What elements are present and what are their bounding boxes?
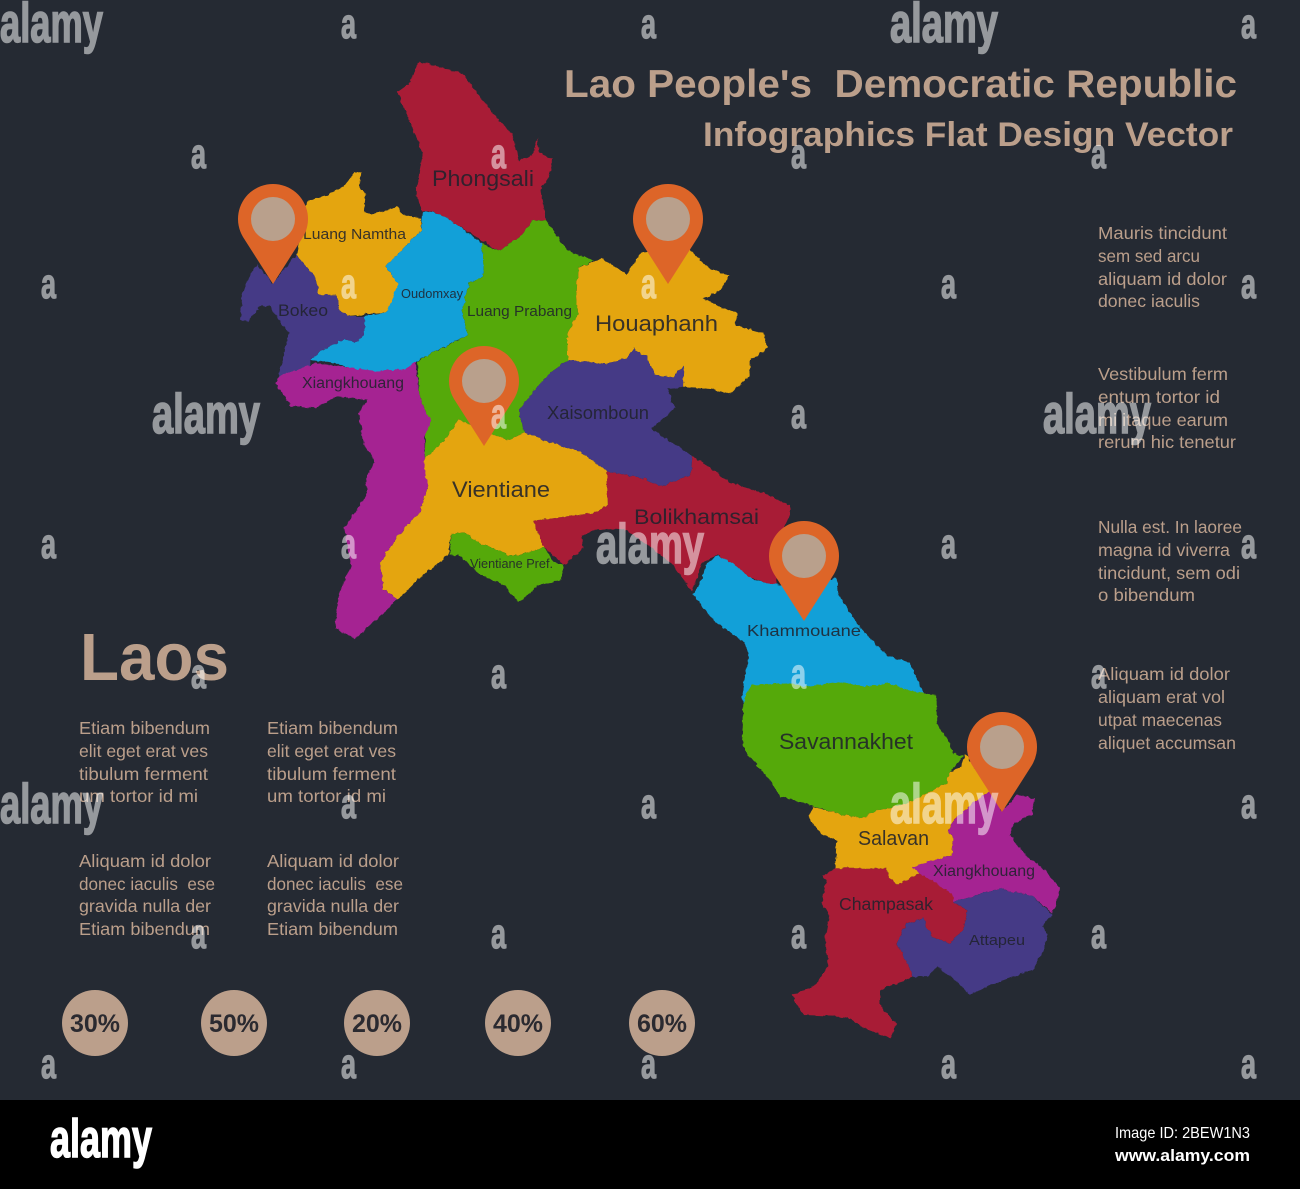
stock photo watermarks: a: [1241, 1040, 1256, 1087]
region: Khammouane: [693, 556, 925, 713]
region labels: Xaisomboun: [547, 403, 649, 423]
stock photo watermarks: a: [1091, 910, 1106, 957]
text block: right column 4: [1098, 664, 1236, 753]
text block: right column 4: aliquet accumsan: [1098, 733, 1236, 753]
text block: right column 1: donec iaculis: [1098, 291, 1200, 311]
text block: right column 3: magna id viverra: [1098, 540, 1230, 560]
text block: right column 1: Mauris tincidunt: [1098, 223, 1227, 243]
stock photo watermarks: a: [1091, 130, 1106, 177]
text block: left column 2 top: um tortor id mi: [267, 786, 386, 806]
stock photo watermarks: a: [341, 1040, 356, 1087]
stock photo watermarks: alamy: [596, 512, 704, 575]
text block: left column 2 top: tibulum ferment: [267, 764, 396, 784]
stock photo watermarks: a: [1241, 260, 1256, 307]
text block: left column 1 bottom: [79, 851, 215, 939]
text block: right column 2: entum tortor id: [1098, 387, 1220, 407]
region labels: Vientiane: [452, 477, 550, 502]
stock photo watermarks: a: [791, 910, 806, 957]
percentage circle 50%: [201, 990, 267, 1056]
region labels: Xiangkhouang: [302, 375, 404, 392]
region: Phongsali: [398, 61, 553, 251]
icon: map pin Houaphanh: [633, 184, 703, 284]
region labels: [278, 166, 1035, 949]
text block: right column 3: tincidunt, sem odi: [1098, 563, 1240, 583]
text block: right column 1: sem sed arcu: [1098, 246, 1200, 266]
stock photo watermarks: alamy: [152, 382, 260, 445]
region labels: Khammouane: [747, 623, 861, 640]
percentage circle 60%: [629, 990, 695, 1056]
footer logo: alamy: [50, 1109, 152, 1169]
percentage circle 30%: [62, 990, 128, 1056]
region: Luang Namtha: [296, 172, 421, 316]
stock photo watermarks: a: [941, 520, 956, 567]
stock photo watermarks: a: [341, 0, 356, 47]
stock photo watermarks: a: [341, 260, 356, 307]
region labels: Luang Namtha: [303, 226, 407, 243]
text block: left column 1 top: [79, 718, 210, 806]
region labels: Savannakhet: [779, 729, 913, 754]
region: Xiangkhouang north: [275, 362, 432, 639]
icon: map pin Khammouane: [769, 521, 839, 621]
stock photo watermarks: a: [491, 650, 506, 697]
stock photo watermarks: a: [491, 390, 506, 437]
stock photo watermarks: alamy: [0, 772, 103, 835]
region labels: Houaphanh: [595, 311, 718, 336]
icon: map pin Bokeo: [238, 184, 308, 284]
percentage circle 60%: 60%: [637, 1010, 687, 1038]
stock photo watermarks: a: [1241, 780, 1256, 827]
region labels: Xiangkhouang: [933, 863, 1035, 880]
stock photo watermarks: a: [41, 260, 56, 307]
percentage circle 20%: 20%: [352, 1010, 402, 1038]
text block: left column 1 bottom: donec iaculis ese: [79, 874, 215, 894]
region: Vientiane Prefecture: [450, 532, 564, 603]
text block: right column 4: aliquam erat vol: [1098, 687, 1225, 707]
region: Luang Prabang: [417, 220, 594, 459]
text block: right column 1: aliquam id dolor: [1098, 269, 1227, 289]
stock photo watermarks: alamy: [890, 772, 998, 835]
stock photo watermarks: a: [1241, 0, 1256, 47]
region: Champasak: [792, 868, 967, 1038]
text block: left column 2 bottom: gravida nulla der: [267, 896, 399, 916]
text block: left column 2 top: [267, 718, 398, 806]
text block: right column 4: utpat maecenas: [1098, 710, 1222, 730]
image id: Image ID: 2BEW1N3: [1115, 1125, 1250, 1142]
region: Bokeo: [240, 255, 365, 377]
stock photo watermarks: a: [41, 520, 56, 567]
region: Savannakhet: [742, 682, 963, 818]
text block: left column 2 bottom: Etiam bibendum: [267, 919, 398, 939]
percentage circle 40%: 40%: [493, 1010, 543, 1038]
region labels: Champasak: [839, 894, 933, 914]
stock photo watermarks: a: [941, 260, 956, 307]
text block: right column 2: [1098, 364, 1236, 452]
region labels: Salavan: [858, 828, 929, 850]
region: Xiangkhouang south: [912, 790, 1060, 913]
text block: right column 3: [1098, 517, 1242, 605]
stock photo watermarks: a: [1241, 520, 1256, 567]
percentage circle 20%: [344, 990, 410, 1056]
percentage circle 50%: 50%: [209, 1010, 259, 1038]
stock photo watermarks: a: [491, 910, 506, 957]
stock photo watermarks: a: [941, 1040, 956, 1087]
icon: map pin Xiangkhouang: [967, 712, 1037, 812]
text block: left column 1 bottom: Etiam bibendum: [79, 919, 210, 939]
stock photo watermarks: a: [191, 130, 206, 177]
region labels: Bokeo: [278, 301, 328, 320]
text block: right column 4: Aliquam id dolor: [1098, 664, 1230, 684]
text block: left column 2 bottom: [267, 851, 403, 939]
text block: right column 3: o bibendum: [1098, 585, 1195, 605]
icon: map pin Vientiane: [449, 346, 519, 446]
footer url: www.alamy.com: [1114, 1146, 1250, 1165]
region: Attapeu: [897, 888, 1052, 995]
region: Xaisomboun: [519, 348, 692, 486]
subtitle: Infographics Flat Design Vector: [703, 116, 1233, 154]
stock photo watermarks: a: [791, 390, 806, 437]
region: Vientiane: [380, 419, 608, 599]
stock photo watermarks: a: [1091, 650, 1106, 697]
stock photo watermarks: a: [191, 650, 206, 697]
heading: Laos: Laos: [80, 620, 229, 695]
region: Salavan: [808, 753, 990, 885]
text block: right column 2: mi itaque earum: [1098, 410, 1228, 430]
text block: right column 3: Nulla est. In laoree: [1098, 517, 1242, 537]
footer bar: [0, 1100, 1300, 1189]
stock photo watermarks: a: [341, 780, 356, 827]
text block: left column 1 top: um tortor id mi: [79, 786, 198, 806]
text block: right column 2: Vestibulum ferm: [1098, 364, 1228, 384]
text block: left column 1 top: elit eget erat ves: [79, 741, 208, 761]
text block: left column 1 top: Etiam bibendum: [79, 718, 210, 738]
stock photo watermarks: a: [641, 0, 656, 47]
stock photo watermarks: a: [641, 780, 656, 827]
region: Oudomxay: [310, 211, 484, 373]
text block: left column 2 top: elit eget erat ves: [267, 741, 396, 761]
stock photo watermarks: a: [191, 910, 206, 957]
stock photo watermarks: a: [641, 260, 656, 307]
region labels: Oudomxay: [401, 287, 464, 301]
region labels: Vientiane Pref.: [470, 557, 553, 571]
stock photo watermarks: a: [341, 520, 356, 567]
text block: left column 1 bottom: gravida nulla der: [79, 896, 211, 916]
stock photo watermarks: a: [491, 130, 506, 177]
stock photo watermarks: a: [791, 130, 806, 177]
stock photo watermarks: a: [791, 650, 806, 697]
region labels: Phongsali: [432, 166, 534, 191]
title: Lao People's Democratic Republic: [564, 63, 1237, 106]
region labels: Luang Prabang: [467, 303, 572, 320]
stock photo watermarks: a: [641, 1040, 656, 1087]
percentage circle 40%: [485, 990, 551, 1056]
text block: left column 2 bottom: Aliquam id dolor: [267, 851, 399, 871]
percentage circle 30%: 30%: [70, 1010, 120, 1038]
text block: right column 1: [1098, 223, 1227, 311]
region labels: Attapeu: [969, 932, 1025, 949]
text block: left column 2 bottom: donec iaculis ese: [267, 874, 403, 894]
stock photo watermarks: alamy: [1043, 382, 1151, 445]
text block: left column 1 top: tibulum ferment: [79, 764, 208, 784]
text block: right column 2: rerum hic tenetur: [1098, 432, 1236, 452]
map of Laos: [240, 61, 1060, 1038]
stock photo watermarks: a: [41, 1040, 56, 1087]
region: Bolikhamsai: [534, 456, 790, 591]
text block: left column 1 bottom: Aliquam id dolor: [79, 851, 211, 871]
text block: left column 2 top: Etiam bibendum: [267, 718, 398, 738]
region: Houaphanh: [567, 247, 767, 394]
region labels: Bolikhamsai: [634, 506, 759, 529]
